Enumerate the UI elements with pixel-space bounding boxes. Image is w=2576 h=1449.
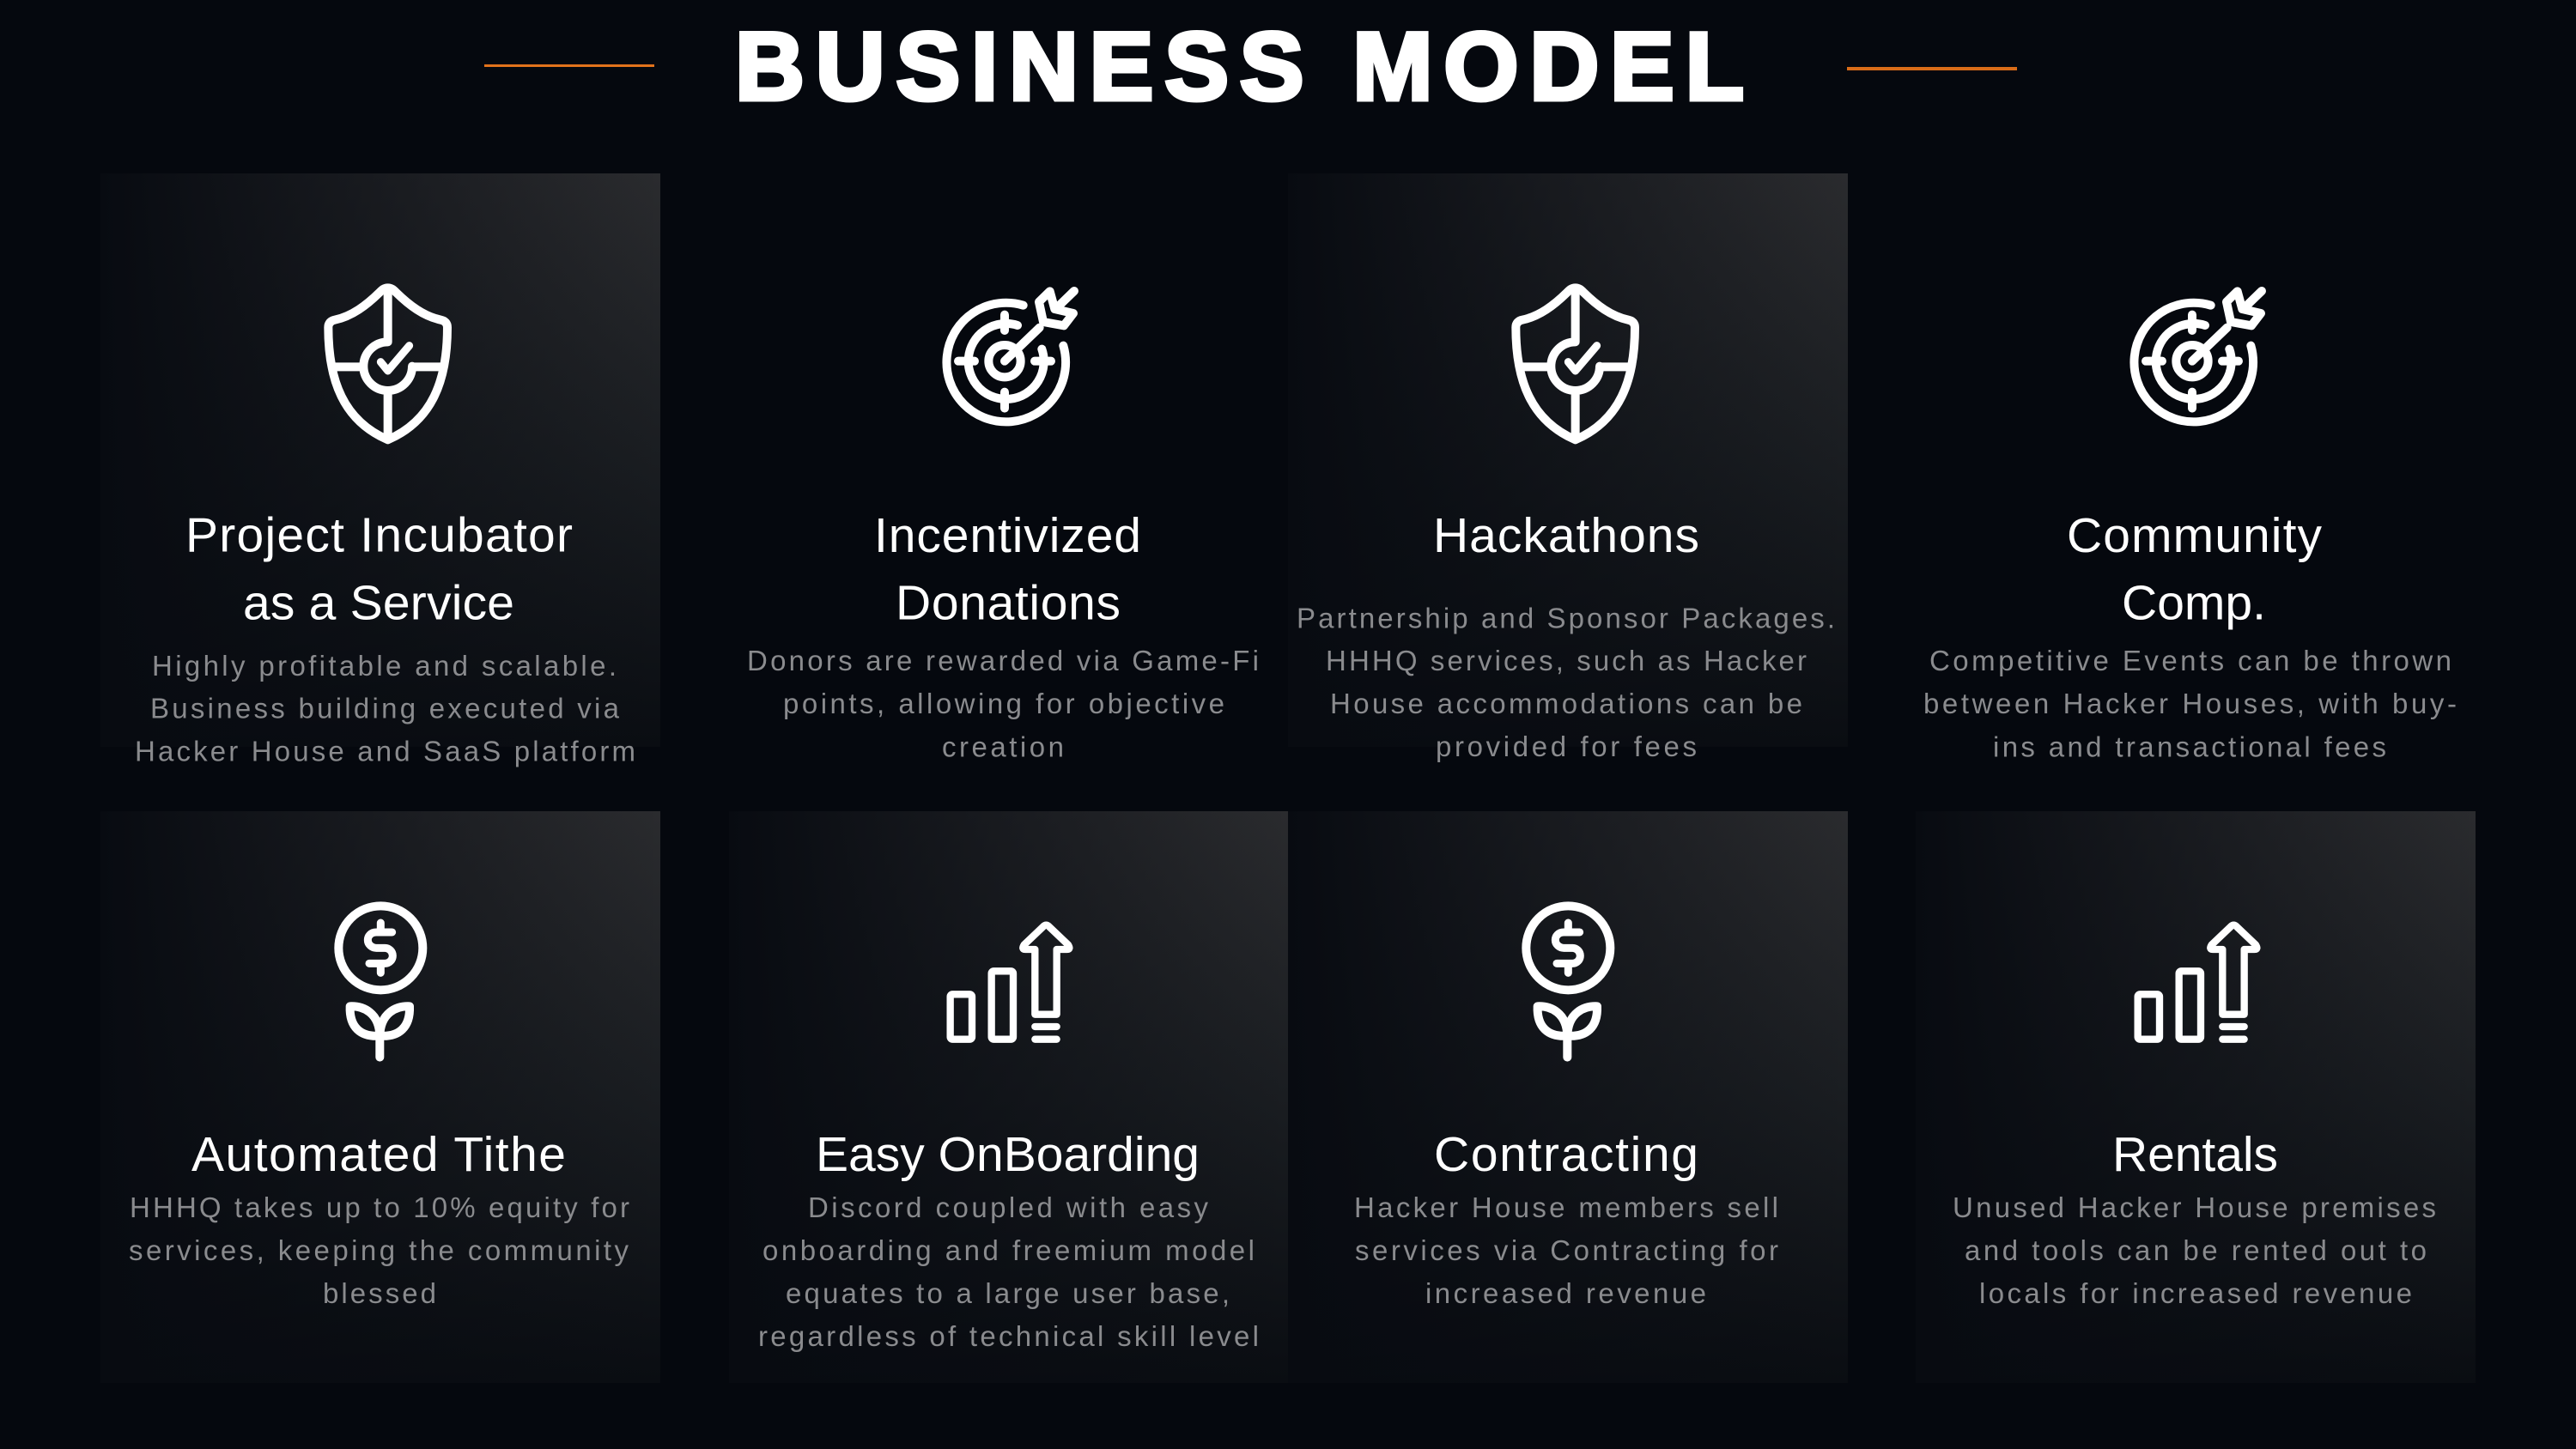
description [1297, 603, 1835, 762]
description: HHHQ services, such as Hacker [1326, 645, 1807, 676]
heading: as a Service [243, 575, 514, 630]
heading: Contracting [1434, 1127, 1698, 1182]
heading: Automated Tithe [191, 1127, 566, 1182]
panel: Easy OnBoarding [729, 811, 1288, 1383]
panel: Contracting [1288, 811, 1848, 1383]
description: increased revenue [1425, 1277, 1706, 1309]
description: Donors are rewarded via Game-Fi [747, 645, 1259, 676]
description: points, allowing for objective [783, 688, 1224, 719]
heading: Community [2067, 508, 2322, 563]
heading: Hackathons [1433, 508, 1699, 563]
description [135, 650, 635, 767]
heading: Easy OnBoarding [816, 1127, 1200, 1182]
description: Unused Hacker House premises [1953, 1191, 2436, 1223]
description: services, keeping the community [129, 1234, 629, 1266]
description: onboarding and freemium model [762, 1234, 1255, 1266]
panel: Rentals [1916, 811, 2476, 1383]
description: Hacker House and SaaS platform [135, 735, 635, 767]
title accent line right [1847, 67, 2017, 70]
description: Partnership and Sponsor Packages. [1297, 603, 1835, 634]
description [1923, 645, 2457, 762]
description [758, 1191, 1259, 1352]
panel: Automated Tithe [100, 811, 660, 1383]
description: Competitive Events can be thrown [1929, 645, 2451, 676]
description: Hacker House members sell [1354, 1191, 1778, 1223]
description: regardless of technical skill level [758, 1320, 1259, 1352]
description [1953, 1191, 2436, 1309]
description: between Hacker Houses, with buy- [1923, 688, 2457, 719]
description [1354, 1191, 1778, 1309]
description: services via Contracting for [1355, 1234, 1778, 1266]
title accent line left [484, 64, 654, 67]
heading: Rentals [2112, 1127, 2278, 1182]
description: and tools can be rented out to [1965, 1234, 2427, 1266]
description: HHHQ takes up to 10% equity for [130, 1191, 629, 1223]
description: House accommodations can be [1330, 688, 1802, 719]
title: Business Model: BUSINESS MODEL [735, 13, 1744, 120]
description: blessed [323, 1277, 436, 1309]
description [129, 1191, 629, 1309]
description: ins and transactional fees [1993, 731, 2386, 762]
heading: Donations [896, 575, 1121, 630]
panel: Project Incubator as a Service [100, 173, 660, 767]
description [747, 645, 1259, 762]
panel: Community Comp. [1923, 291, 2457, 762]
heading: Incentivized [874, 508, 1141, 563]
description: equates to a large user base, [786, 1277, 1230, 1309]
heading: Project Incubator [185, 508, 573, 563]
description: provided for fees [1436, 731, 1697, 762]
heading [874, 508, 1141, 630]
description: creation [942, 731, 1064, 762]
description: Discord coupled with easy [808, 1191, 1209, 1223]
heading [185, 508, 573, 630]
description: Highly profitable and scalable. [152, 650, 617, 682]
description: Business building executed via [150, 692, 620, 724]
description: locals for increased revenue [1979, 1277, 2412, 1309]
heading [2067, 508, 2322, 630]
panel: Hackathons [1288, 173, 1848, 762]
panel: Incentivized Donations [747, 291, 1259, 762]
heading: Comp. [2122, 575, 2266, 630]
